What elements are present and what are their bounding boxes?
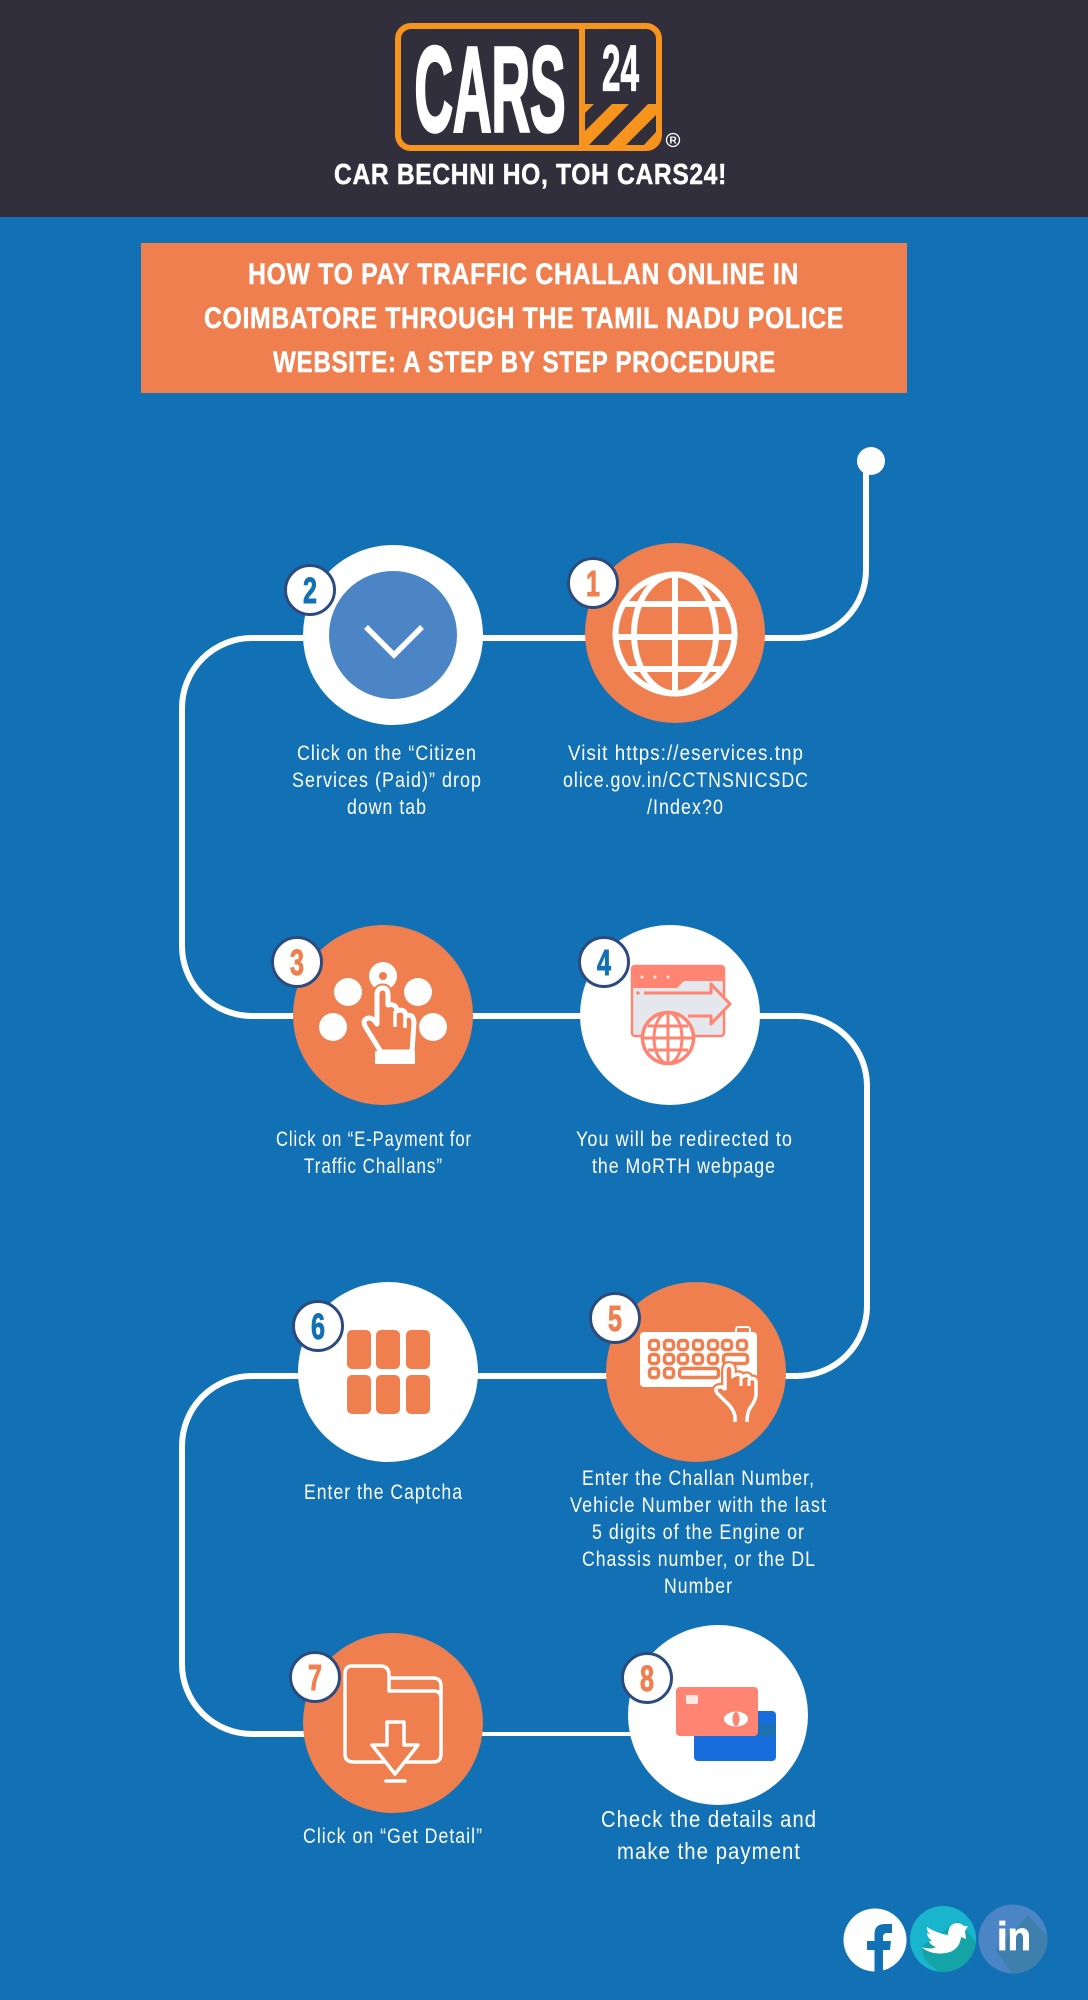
- step 7: [290, 1633, 483, 1848]
- caption step 8: make the payment: [617, 1838, 801, 1864]
- caption step 2: down tab: [347, 796, 427, 819]
- caption step 3: [276, 1128, 472, 1178]
- badge 2: 2: [303, 570, 317, 611]
- caption step 4: You will be redirected to: [576, 1128, 793, 1151]
- step 6: [294, 1282, 478, 1504]
- caption step 5: Enter the Challan Number,: [582, 1467, 815, 1490]
- logo: CARS24: CARS: [414, 21, 566, 157]
- badge 7: 7: [308, 1657, 322, 1698]
- icon: browser redirect: [632, 966, 730, 1064]
- caption step 5: Number: [664, 1575, 733, 1598]
- badge 2: [286, 566, 334, 614]
- caption step 7: Click on “Get Detail”: [303, 1825, 483, 1848]
- caption step 2: Click on the “Citizen: [297, 742, 477, 765]
- badge 1: [568, 558, 618, 608]
- badge 6: [294, 1302, 342, 1350]
- badge 8: 8: [640, 1658, 654, 1699]
- icon: globe: [615, 574, 735, 694]
- caption step 5: Vehicle Number with the last: [570, 1494, 827, 1517]
- step 5: [570, 1282, 827, 1598]
- caption step 6: Enter the Captcha: [304, 1481, 463, 1504]
- caption step 1: olice.gov.in/CCTNSNICSDC: [563, 769, 809, 792]
- caption step 3: Click on “E-Payment for: [276, 1128, 472, 1151]
- caption step 2: [292, 742, 482, 819]
- step 8: [601, 1625, 817, 1864]
- step 3: [272, 925, 473, 1178]
- step 2: [286, 545, 483, 819]
- caption step 5: [570, 1467, 827, 1598]
- caption step 8: Check the details and: [601, 1806, 817, 1832]
- badge 4: [580, 938, 628, 986]
- caption step 1: Visit https://eservices.tnp: [568, 742, 804, 765]
- logo: CARS24: R: [670, 136, 678, 146]
- badge 6: 6: [311, 1306, 325, 1347]
- icon: linkedin: [978, 1904, 1048, 1974]
- caption step 2: Services (Paid)” drop: [292, 769, 482, 792]
- caption step 8: [601, 1806, 817, 1864]
- title banner: WEBSITE: A STEP BY STEP PROCEDURE: [273, 346, 776, 379]
- icon: facebook: [844, 1908, 906, 1972]
- badge 3: 3: [290, 942, 304, 983]
- badge 1: 1: [586, 563, 600, 604]
- tagline: CAR BECHNI HO, TOH CARS24!: [334, 159, 727, 191]
- icon: captcha grid: [347, 1330, 430, 1414]
- caption step 1: /Index?0: [647, 796, 724, 819]
- caption step 5: Chassis number, or the DL: [582, 1548, 816, 1571]
- caption step 3: Traffic Challans”: [304, 1155, 443, 1178]
- title banner: HOW TO PAY TRAFFIC CHALLAN ONLINE IN: [248, 258, 799, 291]
- connector path: [182, 447, 885, 1734]
- icon: hand tapping: [319, 962, 447, 1064]
- step 4: [576, 925, 793, 1178]
- title banner: [141, 243, 907, 393]
- icon: linkedin: in: [997, 1915, 1031, 1959]
- icon: payment cards: [676, 1687, 776, 1761]
- caption step 4: the MoRTH webpage: [592, 1155, 776, 1178]
- caption step 1: [563, 742, 809, 819]
- badge 5: 5: [608, 1298, 622, 1339]
- caption step 5: 5 digits of the Engine or: [592, 1521, 805, 1544]
- badge 8: [622, 1654, 672, 1702]
- icon: folder download: [345, 1666, 441, 1781]
- caption step 4: [576, 1128, 793, 1178]
- icon: keyboard and hand: [640, 1327, 757, 1422]
- social icons: [844, 1904, 1048, 1974]
- icon: chevron: [366, 627, 422, 655]
- step 1: [563, 543, 809, 819]
- title banner: COIMBATORE THROUGH THE TAMIL NADU POLICE: [204, 302, 844, 335]
- badge 7: [290, 1652, 340, 1702]
- badge 4: 4: [597, 942, 611, 983]
- badge 3: [272, 938, 322, 986]
- badge 5: [590, 1294, 640, 1342]
- header band: [0, 0, 1088, 217]
- logo: CARS24: 24: [602, 32, 639, 104]
- icon: twitter: [910, 1906, 976, 1972]
